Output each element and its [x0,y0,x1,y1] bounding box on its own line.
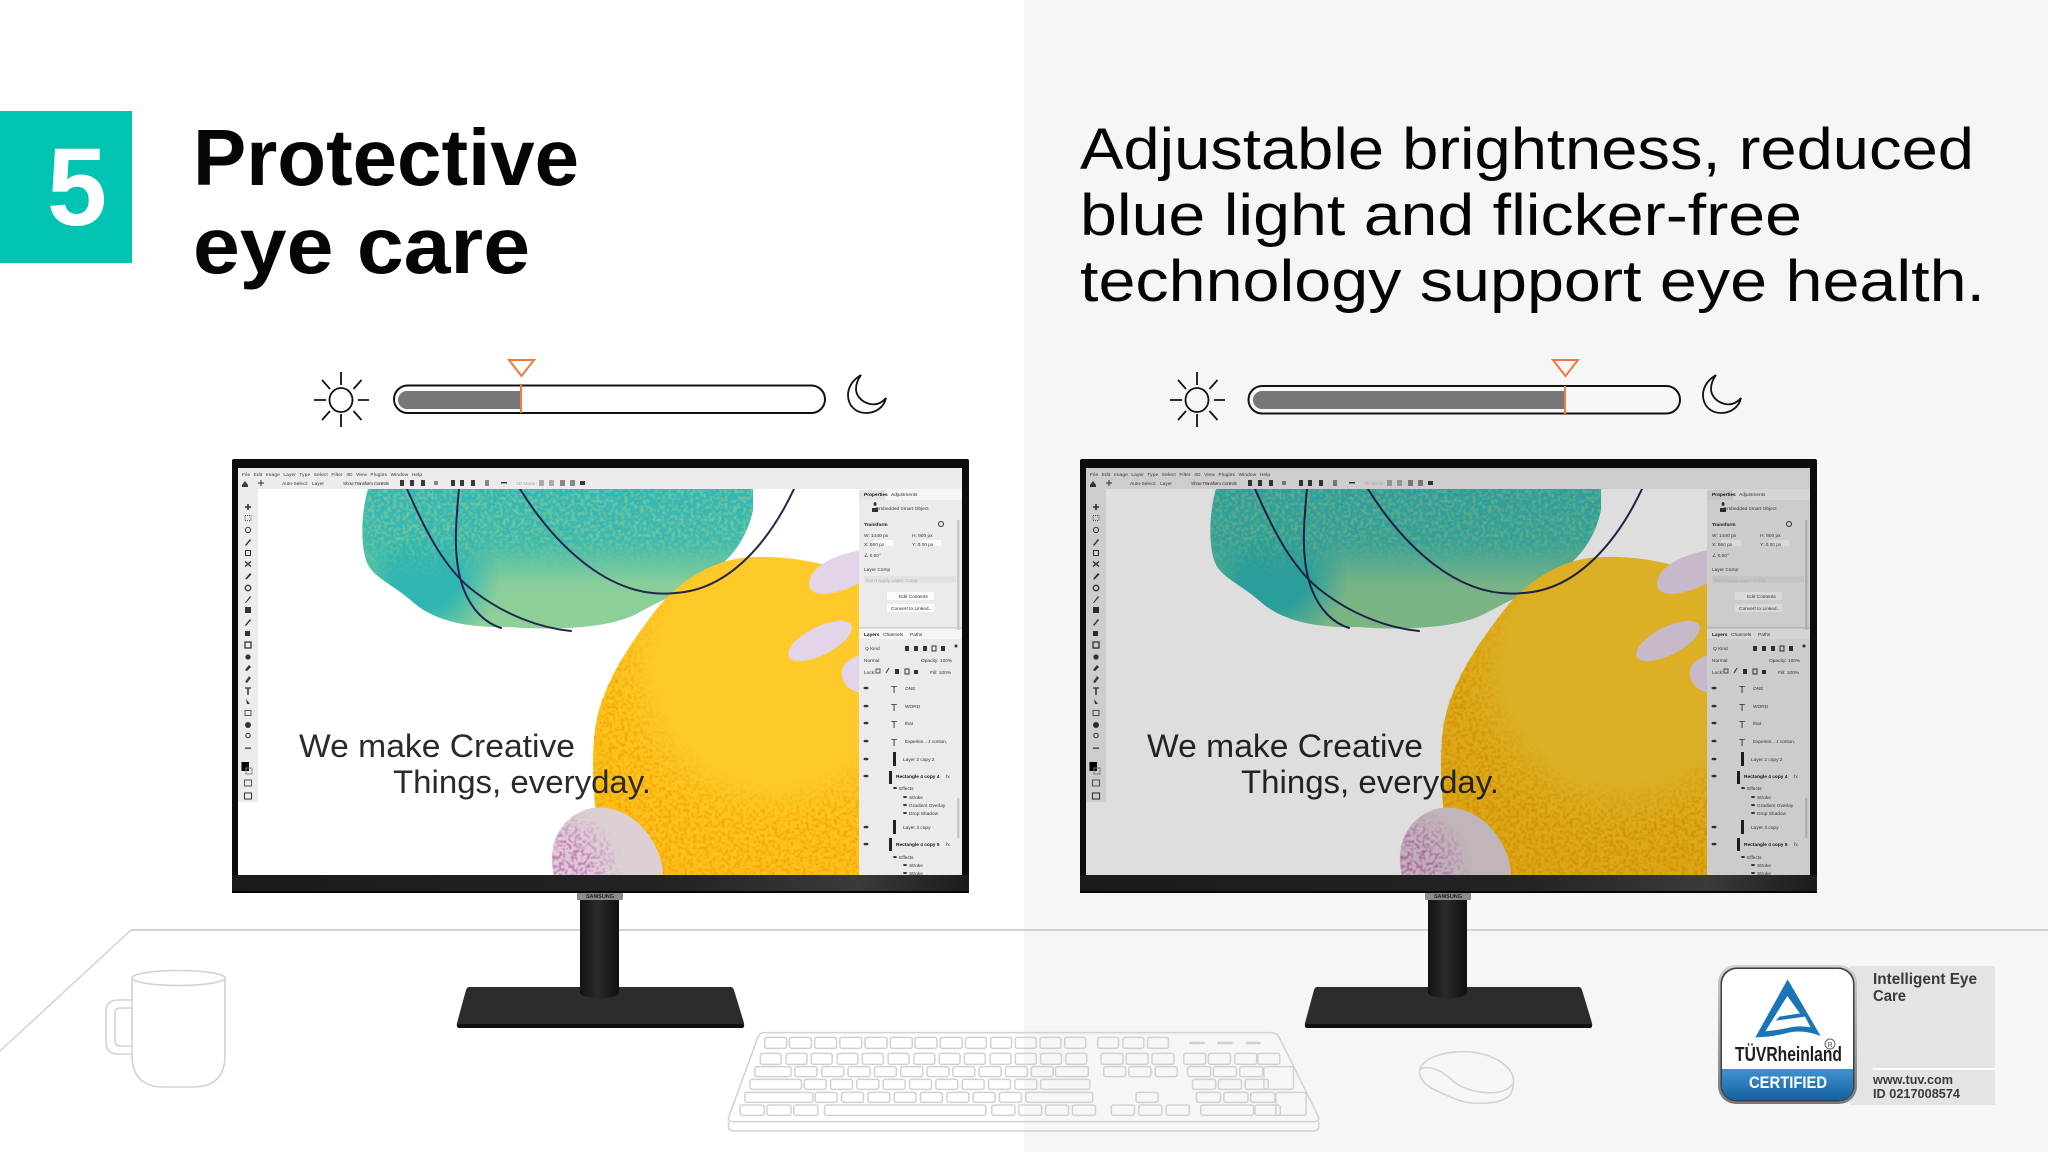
editor labels: Q Kind [865,646,880,652]
dimming overlay [1086,468,1810,875]
editor labels: W: 1440 px [1712,533,1737,539]
editor labels: Fill: 100% [930,670,952,676]
editor labels: Edit Contents [899,594,928,600]
stand: SAMSUNG [1434,894,1462,900]
editor labels: Adjustments [891,492,918,498]
description text: technology support eye health. [1080,249,1985,314]
number badge: 5 [47,126,107,249]
editor labels: T [1739,685,1745,696]
editor labels: Effects [899,786,914,792]
editor labels: T [891,738,897,749]
editor labels: Fill: 100% [1778,670,1800,676]
screen slogan: We make Creative [1147,728,1423,764]
editor labels: Channels [1731,632,1752,638]
description text [1080,117,1985,314]
screen slogan: Things, everyday. [393,764,651,800]
brightness slider: high setting [1170,360,1741,427]
editor labels [1090,472,1801,877]
TUV logo: R [1827,1042,1833,1049]
editor labels: Y: 0.00 px [1760,542,1782,548]
editor labels: Don't Apply Layer Comp [866,578,918,584]
editor labels: Transform [1712,522,1735,528]
marker triangle [1553,360,1578,376]
editor labels: Experien... z corson, [905,739,947,745]
editor labels: WORD [905,704,921,710]
editor labels: T [1739,738,1745,749]
editor labels: Layer 3 copy [1751,825,1779,831]
monitor frame [232,459,969,893]
editor labels: 3D Mode: [1364,481,1385,487]
editor labels: ∠ 0.00° [1712,553,1729,559]
icon: moon [848,375,886,413]
certificate info panel: Care [1873,988,1906,1005]
editor labels: ∠ 0.00° [864,553,881,559]
editor labels: Q Kind [1713,646,1728,652]
editor labels: H: 900 px [1760,533,1781,539]
editor labels: Properties [1712,492,1736,498]
monitor left [232,459,969,1028]
editor labels: Gradient Overlay [909,803,946,809]
editor labels: Gradient Overlay [1757,803,1794,809]
editor labels: Properties [864,492,888,498]
screen slogan [299,728,651,800]
editor labels: Stroke [1757,863,1771,869]
editor labels: fx [946,842,950,848]
certification badge [1718,965,1995,1105]
background: grey right half [1024,0,2048,1152]
editor labels: WORD [1753,704,1769,710]
editor labels: Opacity: 100% [1769,658,1801,664]
editor labels: Normal [1712,658,1727,664]
editor labels: T [1093,686,1099,696]
editor labels: Layer Comp [864,567,890,573]
editor labels: Paths [910,632,923,638]
editor labels: fx [946,774,950,780]
editor labels: Adjustments [1739,492,1766,498]
editor labels: Layer [312,481,324,487]
stand [1305,891,1592,1028]
editor labels: Stroke [909,795,923,801]
editor labels: W: 1440 px [864,533,889,539]
editor labels: Lock: [1712,670,1723,676]
editor labels: Layer [1160,481,1172,487]
editor labels: Paths [1758,632,1771,638]
editor labels: X: 560 px [864,542,885,548]
editor labels: Channels [883,632,904,638]
editor labels: Layers [1712,632,1728,638]
editor labels: T [891,685,897,696]
certificate info panel [1850,966,1995,1105]
stand [457,891,744,1028]
desk edge lines [0,930,2048,1051]
TUV logo: TÜVRheinland [1735,1043,1842,1066]
TUV logo: CERTIFIED [1749,1073,1827,1092]
screen slogan: We make Creative [299,728,575,764]
editor labels: H: 900 px [912,533,933,539]
editor labels: Layer 2 copy 2 [903,757,935,763]
editor labels: Don't Apply Layer Comp [1714,578,1766,584]
title: eye care [193,201,530,290]
editor labels: Effects [1747,855,1762,861]
editor labels: fx [1794,774,1798,780]
editor labels: Show Transform Controls [343,481,390,487]
editor labels: that [1753,721,1762,727]
editor labels: Embedded Smart Object [876,506,929,512]
editor interface panels [1086,468,1810,875]
title [193,113,579,290]
certificate info panel: ID 0217008574 [1873,1087,1960,1101]
number badge [0,111,132,263]
monitor frame [1080,459,1817,893]
icon: moon [1703,375,1741,413]
editor labels: T [1739,720,1745,731]
editor labels: ONE [905,686,915,692]
background: white left half [0,0,1024,1152]
editor labels: Rectangle 4 copy 4 [896,774,940,780]
editor labels: Layer Comp [1712,567,1738,573]
editor labels: Rectangle 4 copy 5 [1744,842,1788,848]
editor labels: Auto-Select: [1130,481,1156,487]
editor labels: 3D Mode: [516,481,537,487]
screen slogan [1147,728,1499,800]
editor labels: Rectangle 4 copy 5 [896,842,940,848]
editor labels: Stroke [1757,871,1771,877]
editor labels: Convert to Linked... [891,606,933,612]
icon: mouse outline [1420,1052,1513,1103]
editor labels: Edit Contents [1747,594,1776,600]
editor labels: T [891,703,897,714]
editor labels [242,472,953,877]
stand: SAMSUNG [586,894,614,900]
slider track and fill [394,385,825,413]
editor labels: Stroke [1757,795,1771,801]
icon: keyboard outline [728,1033,1319,1131]
certificate info panel: Intelligent Eye [1873,971,1977,988]
description text: Adjustable brightness, reduced [1080,117,1974,182]
icon: sun [1170,372,1225,427]
editor labels: Stroke [909,871,923,877]
editor labels: T [245,686,251,696]
editor labels: T [1739,703,1745,714]
icon: sun [314,372,369,427]
editor labels: Layers [864,632,880,638]
editor labels: Y: 0.00 px [912,542,934,548]
editor labels: T [891,720,897,731]
editor labels: Opacity: 100% [921,658,953,664]
icon: mug outline [106,970,225,1087]
certificate info panel: www.tuv.com [1872,1073,1953,1087]
editor labels: File Edit Image Layer Type Select Filter 3D View Plugins Window Help [242,472,422,478]
editor labels: Transform [864,522,887,528]
marker triangle [509,360,534,376]
editor labels: Experien... z corson, [1753,739,1795,745]
slider track and fill [1248,386,1680,414]
editor labels: File Edit Image Layer Type Select Filter 3D View Plugins Window Help [1090,472,1270,478]
editor labels: Show Transform Controls [1191,481,1238,487]
monitor right (dimmed) [1080,459,1817,1028]
title: Protective [193,113,579,202]
editor labels: ONE [1753,686,1763,692]
screen slogan: Things, everyday. [1241,764,1499,800]
editor labels: Effects [899,855,914,861]
editor labels: Drop Shadow [909,811,939,817]
editor labels: that [905,721,914,727]
editor labels: Drop Shadow [1757,811,1787,817]
TUV logo [1718,965,1857,1104]
editor labels: Stroke [909,863,923,869]
editor labels: Effects [1747,786,1762,792]
editor labels: Rectangle 4 copy 4 [1744,774,1788,780]
description text: blue light and flicker-free [1080,183,1802,248]
brightness slider: low setting [314,360,886,427]
editor labels: Convert to Linked... [1739,606,1781,612]
editor labels: X: 560 px [1712,542,1733,548]
screen artwork [1086,489,1708,875]
editor labels: Auto-Select: [282,481,308,487]
editor labels: Embedded Smart Object [1724,506,1777,512]
editor labels: Layer 2 copy 2 [1751,757,1783,763]
editor interface panels [238,468,962,875]
editor labels: Normal [864,658,879,664]
editor labels: Layer 3 copy [903,825,931,831]
editor labels: Lock: [864,670,875,676]
screen artwork [238,489,860,875]
editor labels: fx [1794,842,1798,848]
